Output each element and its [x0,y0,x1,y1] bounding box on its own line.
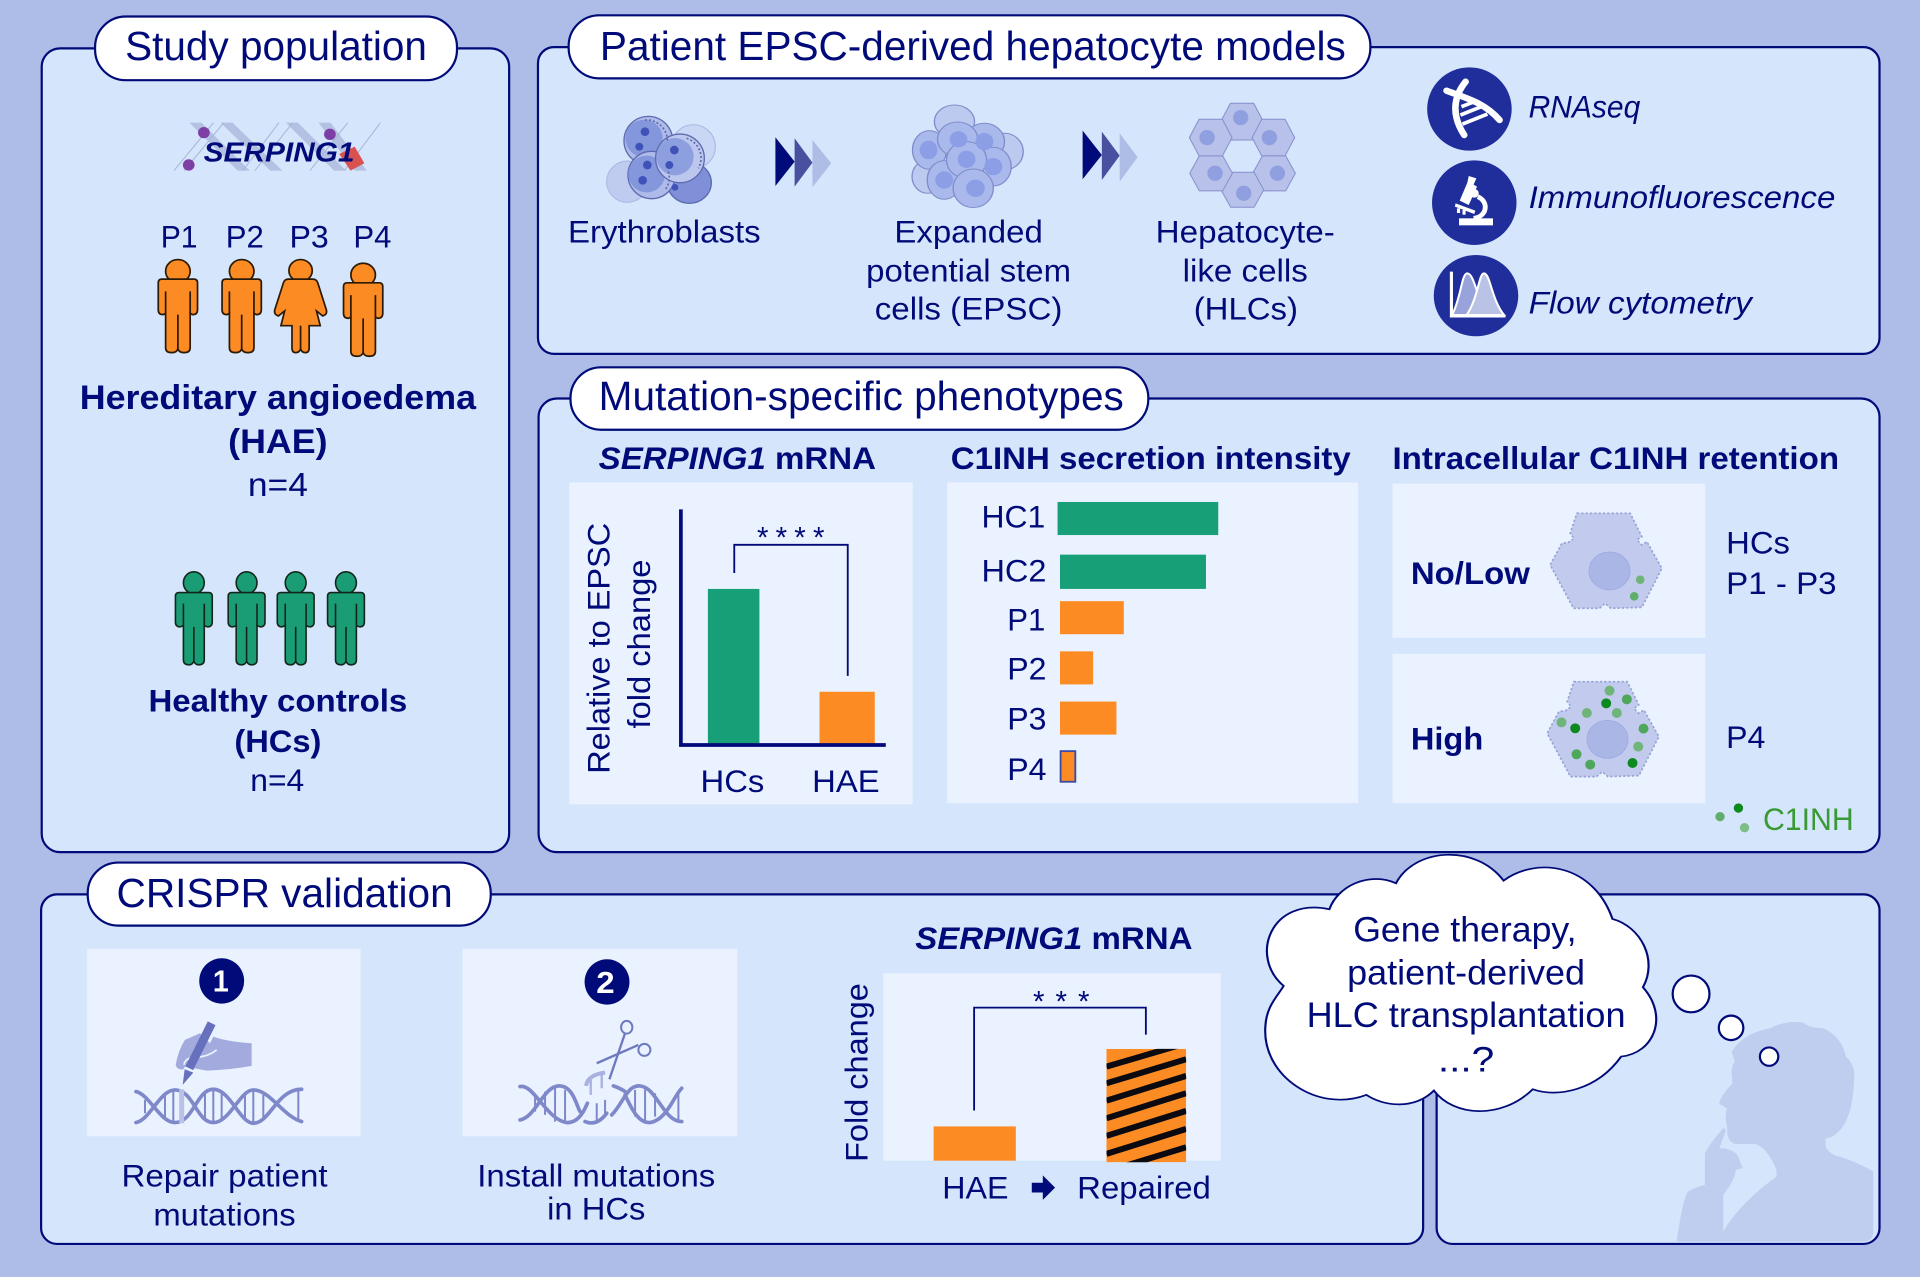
label: expanded potential stem cells [866,213,1071,327]
tile: high retention [1392,654,1705,803]
bar chart: C1INH secretion intensity: P3 [1007,701,1046,737]
label: hepatocyte-like cells: like cells [1183,253,1308,289]
bar chart: SERPING1 mRNA [569,482,913,804]
bar chart: C1INH secretion intensity: HC2 [981,553,1046,589]
label: hepatocyte-like cells [1156,213,1335,327]
label: high retention sample: P4 [1726,719,1765,755]
label: immunofluorescence: Immunofluorescence [1529,179,1835,215]
callout: future therapies thought cloud [1265,855,1656,1111]
heading: study population: Study population [125,23,427,69]
label: install mutations in HCs: in HCs [547,1190,645,1226]
panel: outlook [1437,894,1880,1244]
patient labels: P4 [353,218,391,254]
bar chart: SERPING1 mRNA: Relative to EPSC [581,523,617,774]
label: no or low retention samples: P1 - P3 [1726,565,1837,601]
text: healthy controls: (HCs) [234,723,321,759]
panel: mutation-specific phenotypes [539,367,1880,852]
icon: RNAseq [1427,67,1512,151]
label: no or low retention samples [1726,524,1837,601]
label: repair patient mutations: Repair patient [121,1157,328,1193]
bar chart: fold change after repair [838,973,1221,1206]
text: healthy controls: Healthy controls [148,682,407,718]
text: hereditary angioedema: (HAE) [228,423,328,461]
icon: flow cytometry [1434,255,1518,336]
icon: thought bubbles [1673,976,1778,1066]
label: expanded potential stem cells: potential stem [866,253,1071,289]
label: hepatocyte-like cells: (HLCs) [1194,291,1298,327]
bar chart: C1INH secretion intensity [947,482,1358,803]
heading: CRISPR validation: CRISPR validation [117,870,453,916]
label: repair patient mutations [121,1157,328,1233]
patient labels: P1 [161,218,198,254]
label: erythroblasts: Erythroblasts [568,213,761,249]
legend: C1INH: C1INH [1763,801,1854,837]
label: install mutations in HCs [477,1157,715,1226]
tile: no or low retention [1392,484,1705,638]
tile: high retention: High [1411,720,1483,756]
text: healthy controls [148,682,407,798]
bar chart: C1INH secretion intensity: P2 [1007,651,1046,687]
icon: thinking person silhouette [1677,1022,1873,1242]
legend: C1INH [1715,801,1854,837]
bar chart: fold change after repair: HAE [942,1170,1008,1206]
label: hepatocyte-like cells: Hepatocyte- [1156,213,1335,249]
heading: study population [95,17,457,80]
tile: step 2 install: 2 [596,966,615,1000]
heading: patient EPSC-derived hepatocyte models: Patient EPSC-derived hepatocyte models [600,23,1346,69]
icon: healthy controls in green [175,572,364,665]
arrow: EPSC to HLCs [1083,131,1138,182]
tile: no or low retention: No/Low [1411,555,1530,591]
tile: step 1 repair [87,949,361,1136]
bar chart: fold change after repair: Repaired [1077,1170,1211,1206]
section title: intracellular C1INH retention: Intracellular C1INH retention [1392,440,1839,476]
label: no or low retention samples: HCs [1726,524,1790,560]
icon: immunofluorescence [1432,160,1517,245]
text: hereditary angioedema [80,379,477,504]
icon: SERPING1 gene [174,123,381,171]
bar chart: C1INH secretion intensity: P1 [1007,602,1045,638]
callout: future therapies thought cloud: patient-derived [1347,952,1585,992]
chart title: SERPING1 mRNA: SERPING1 mRNA [599,440,876,476]
patient labels: P3 [290,218,329,254]
bar chart: SERPING1 mRNA: HCs [701,763,764,799]
icon: patients in orange [158,260,383,356]
bar chart: fold change after repair: *** [1033,985,1089,1018]
heading: CRISPR validation [88,863,491,926]
label: expanded potential stem cells: cells (EPSC) [875,291,1062,327]
label: RNAseq: RNAseq [1529,89,1641,125]
tile: step 2 install [463,949,737,1136]
icon: erythroblasts [607,116,715,203]
text: hereditary angioedema: Hereditary angioedema [80,379,477,417]
bar chart: fold change after repair: Fold change [838,983,874,1162]
patient labels: P2 [226,218,264,254]
heading: patient EPSC-derived hepatocyte models [569,15,1370,78]
text: hereditary angioedema: n=4 [248,467,308,504]
panel: patient EPSC-derived hepatocyte models [538,15,1880,354]
callout: future therapies thought cloud: HLC transplantation [1307,995,1626,1035]
text: healthy controls: n=4 [250,762,304,798]
label: expanded potential stem cells: Expanded [894,213,1043,249]
chart title: SERPING1 mRNA after repair: SERPING1 mRNA [915,920,1192,956]
heading: mutation-specific phenotypes: Mutation-specific phenotypes [599,373,1124,419]
icon: expanded potential stem cells [912,105,1023,208]
tile: step 1 repair: 1 [213,965,229,999]
label: install mutations in HCs: Install mutations [477,1157,715,1193]
bar chart: SERPING1 mRNA: **** [757,521,824,554]
panel: study population [42,17,509,852]
bar chart: SERPING1 mRNA: fold change [621,560,657,728]
label: flow cytometry: Flow cytometry [1529,284,1754,320]
patient labels [161,218,391,254]
label: repair patient mutations: mutations [153,1197,296,1233]
arrow: erythroblasts to EPSC [775,137,831,187]
bar chart: C1INH secretion intensity: HC1 [981,499,1045,535]
panel: CRISPR validation [41,863,1423,1244]
icon: SERPING1 gene: SERPING1 [204,136,355,168]
bar chart: C1INH secretion intensity: P4 [1007,751,1046,787]
callout: future therapies thought cloud: ...? [1438,1039,1494,1079]
icon: hepatocyte-like cells [1189,103,1295,207]
chart title: C1INH secretion intensity: C1INH secretion intensity [951,440,1351,476]
callout: future therapies thought cloud: Gene therapy, [1353,910,1576,950]
bar chart: SERPING1 mRNA: HAE [812,763,880,799]
heading: mutation-specific phenotypes [570,367,1148,430]
